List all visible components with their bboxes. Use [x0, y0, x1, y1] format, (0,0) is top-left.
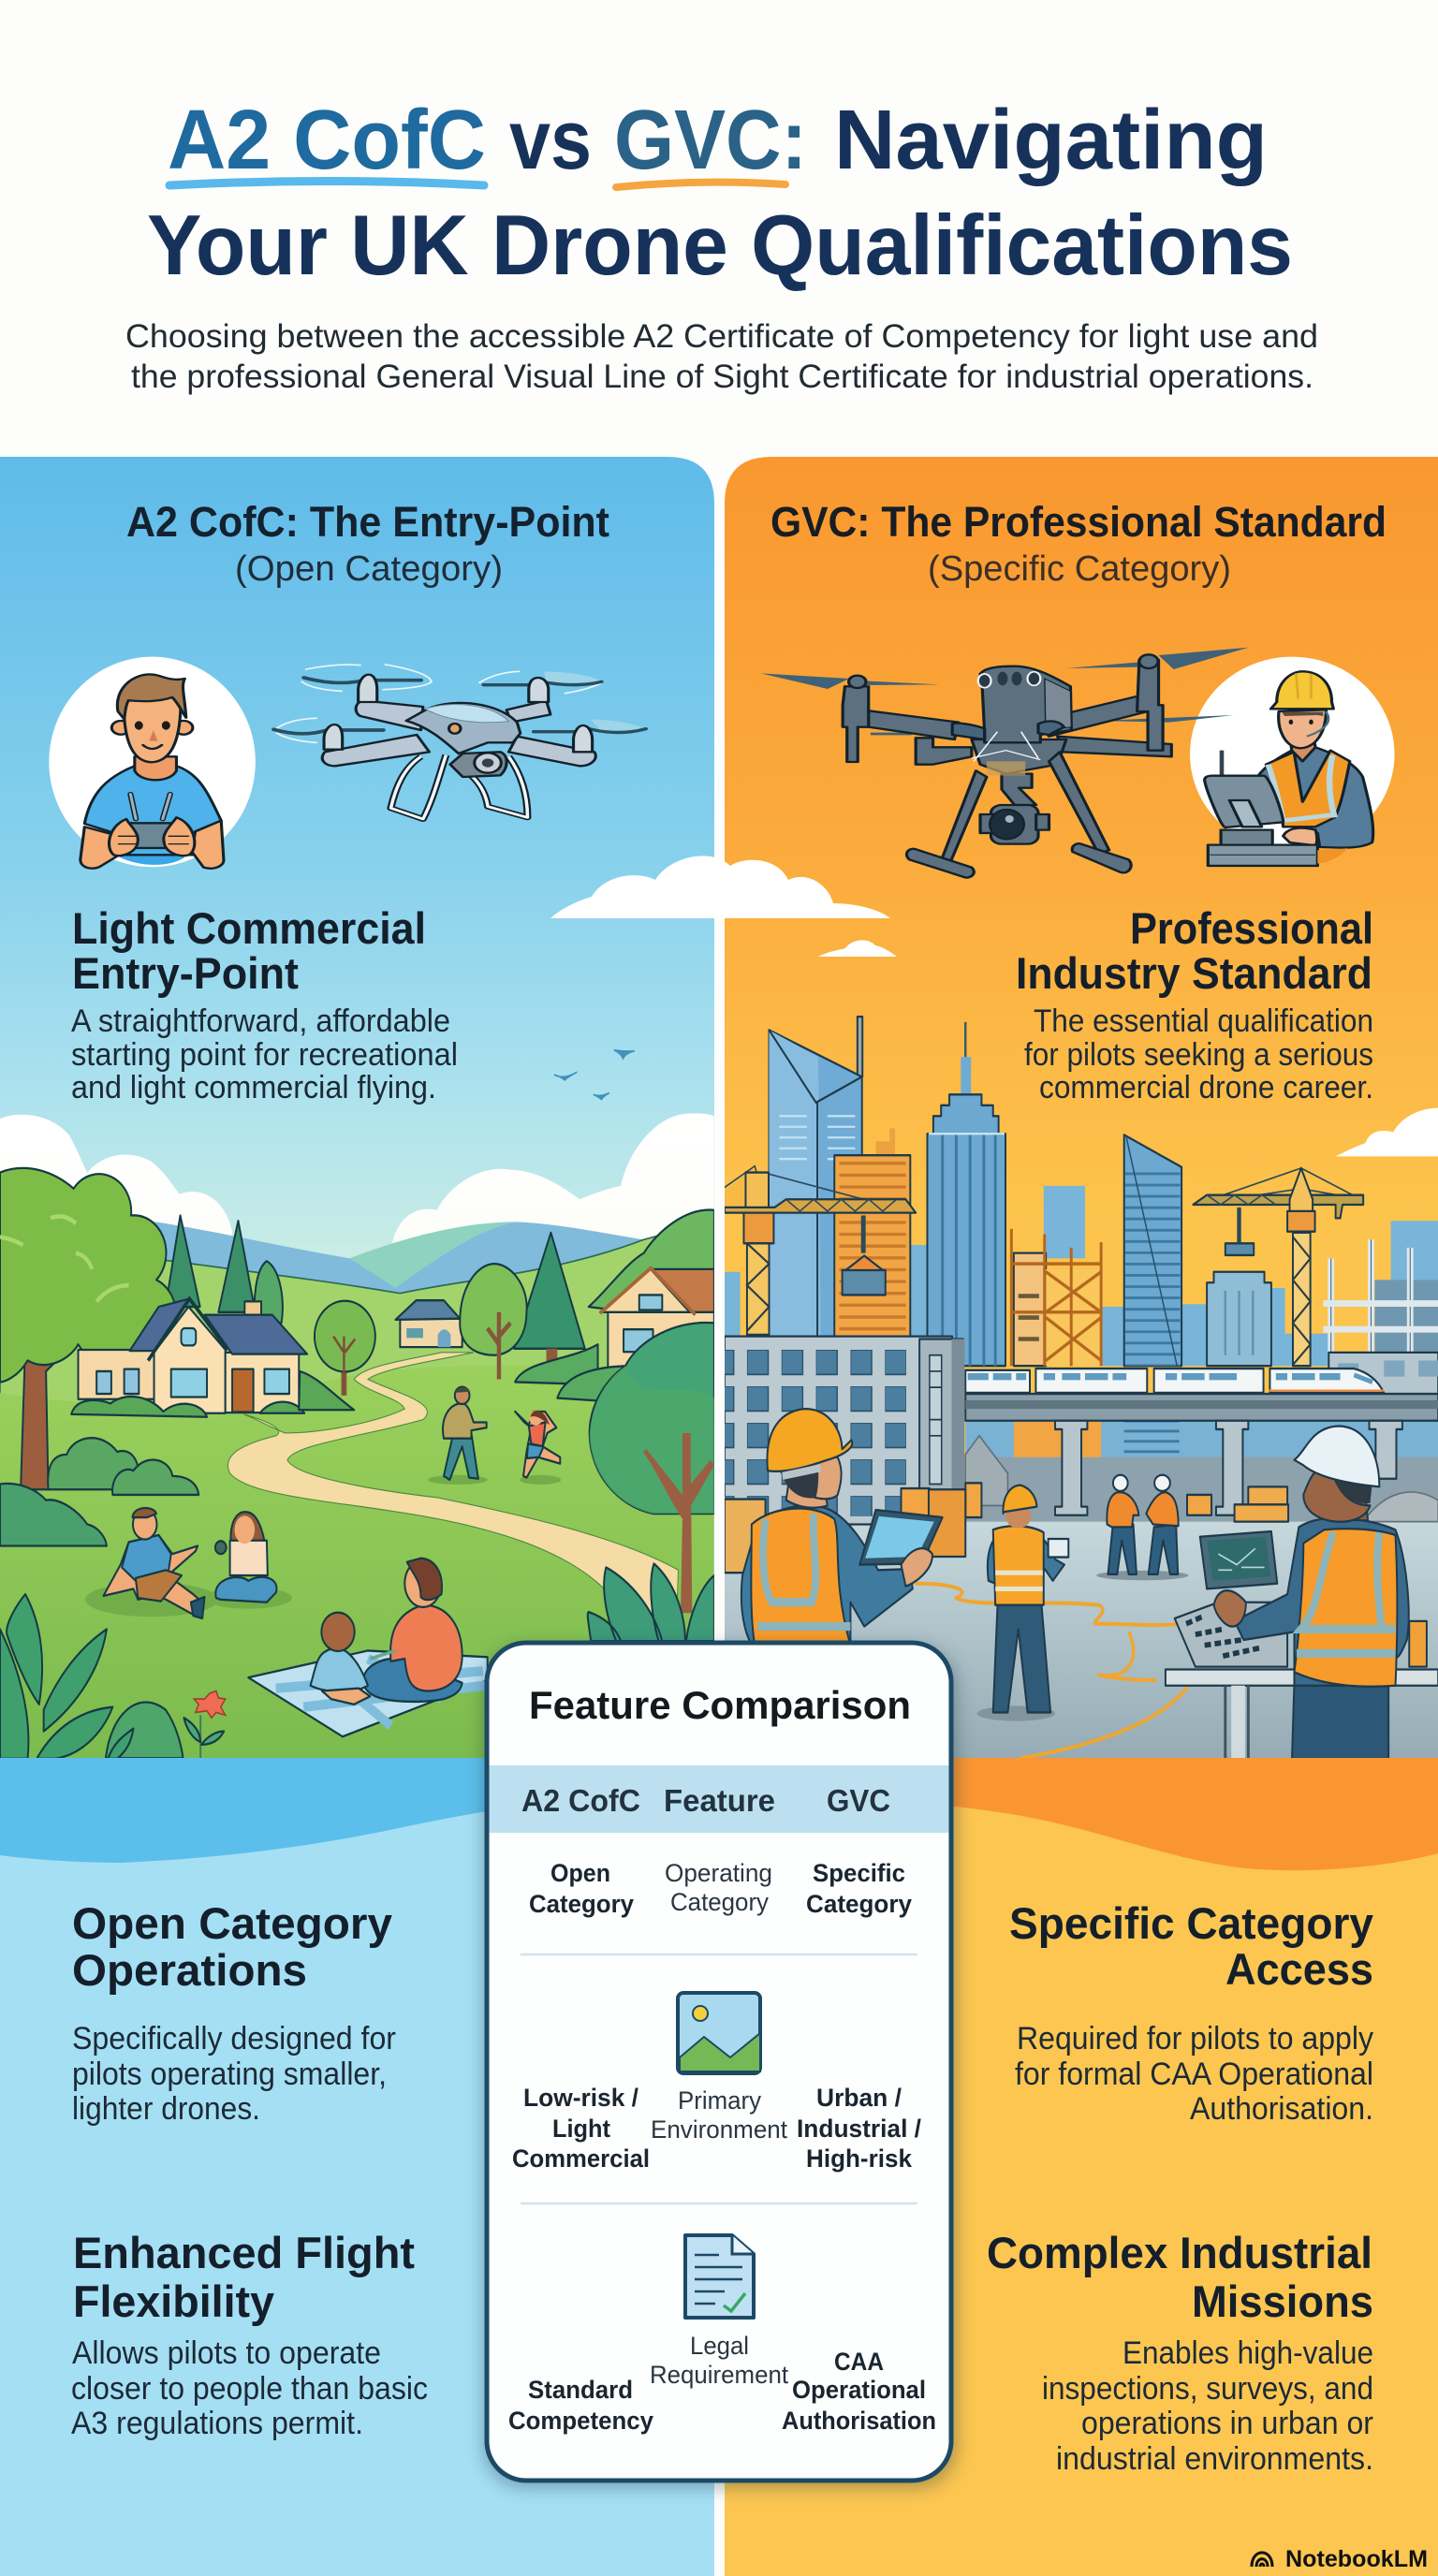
- row: operating category: Category: [806, 1890, 912, 1918]
- row: operating category: Specific: [813, 1859, 905, 1887]
- subtitle: [125, 318, 1318, 395]
- tree middle right: [460, 1264, 598, 1384]
- row: primary environment: Low-risk /: [523, 2084, 638, 2112]
- row: operating category: Category: [670, 1888, 769, 1916]
- row: primary environment: Industrial /: [797, 2115, 921, 2143]
- table header: Feature: [664, 1783, 775, 1818]
- panel heading: A2 CofC: (Open Category): [235, 549, 503, 589]
- description: A2 CofC: and light commercial flying.: [71, 1070, 436, 1105]
- description: A2 CofC: starting point for recreational: [71, 1037, 458, 1073]
- small cloud on GVC panel: [818, 940, 897, 957]
- description: GVC: for pilots seeking a serious: [1024, 1037, 1373, 1073]
- lower panel: A2 CofC: [0, 1758, 714, 2576]
- title: A2 CofC: [168, 94, 486, 187]
- comparison card: [487, 1643, 951, 2481]
- icon: industrial drone: [761, 648, 1249, 878]
- feature: Specific Category Access: Authorisation.: [1190, 2091, 1373, 2127]
- birds: [554, 1050, 635, 1099]
- picnic blanket with parent and child: [248, 1559, 488, 1736]
- small workers: [1096, 1475, 1188, 1580]
- feature: Specific Category Access: [1009, 1898, 1373, 2127]
- main house: [71, 1298, 354, 1417]
- train and viaduct: [965, 1368, 1438, 1421]
- title: GVC:: [614, 94, 807, 187]
- title: Your UK Drone Qualifications: [147, 198, 1293, 293]
- panel heading: GVC: GVC: The Professional Standard: [770, 498, 1387, 546]
- subtitle: Choosing between the accessible A2 Certificate of Competency for light use and: [125, 318, 1318, 355]
- description: GVC: commercial drone career.: [1039, 1070, 1373, 1105]
- cables: [915, 1584, 1188, 1758]
- middle worker: [977, 1486, 1068, 1721]
- row: primary environment: Light: [552, 2115, 610, 2143]
- people: walking man and girl: [428, 1387, 561, 1485]
- row: operating category: Operating: [665, 1859, 772, 1887]
- row: primary environment: Commercial: [512, 2144, 650, 2173]
- feature: Complex Industrial Missions: [987, 2228, 1373, 2477]
- foreground worker right with console: [1166, 1426, 1438, 1759]
- icon: landscape picture: [678, 1993, 760, 2073]
- row: primary environment: [512, 2084, 921, 2173]
- panel heading: A2 CofC: [126, 498, 609, 589]
- subtitle: the professional General Visual Line of Sight Certificate for industrial operations.: [131, 359, 1313, 395]
- subheading: Light Commercial Entry-Point: Entry-Point: [72, 948, 299, 998]
- people: sitting couple: [85, 1508, 292, 1618]
- icon: legal document: [685, 2235, 754, 2318]
- description: GVC: [1024, 1003, 1373, 1105]
- description: A2 CofC: [71, 1003, 458, 1105]
- row: operating category: Open: [550, 1859, 610, 1887]
- table header: [489, 1765, 949, 1833]
- feature: Open Category Operations: [72, 1898, 396, 2127]
- ground and wall: [965, 1457, 1438, 1530]
- subheading: Professional Industry Standard: Industry Standard: [1016, 948, 1372, 998]
- feature: Specific Category Access: Required for pilots to apply: [1017, 2021, 1373, 2056]
- row: primary environment: High-risk: [806, 2144, 913, 2173]
- row: legal requirement: Legal: [690, 2332, 749, 2360]
- spire tower: [927, 1022, 1005, 1366]
- subheading: Professional Industry Standard: [1016, 903, 1373, 998]
- scaffold building: [1011, 1229, 1101, 1366]
- skyline back: [725, 1186, 1438, 1366]
- bushes left: [0, 1438, 198, 1545]
- foreground leaves and flower: [0, 1594, 226, 1759]
- row: operating category: [529, 1859, 912, 1918]
- title: [147, 94, 1293, 293]
- icon: pilot with controller: [49, 657, 256, 869]
- feature: Complex Industrial Missions: Enables high-value: [1123, 2335, 1373, 2371]
- left building: [725, 1337, 964, 1525]
- illustration: countryside park scene: [0, 1050, 714, 1759]
- icon: light drone: [273, 665, 646, 819]
- feature: Open Category Operations: Open Category: [72, 1898, 392, 1948]
- panel: GVC top: [725, 457, 1438, 1759]
- big tree right: [557, 1323, 714, 1613]
- far house: [395, 1300, 462, 1347]
- pine trees: [166, 1215, 585, 1362]
- panel: A2 CofC top: [0, 457, 714, 1759]
- subheading: Light Commercial Entry-Point: [72, 903, 426, 998]
- title: Navigating: [834, 94, 1268, 187]
- feature: Enhanced Flight Flexibility: A3 regulations permit.: [71, 2406, 363, 2441]
- crate right: [1409, 1621, 1427, 1667]
- row: legal requirement: Authorisation: [782, 2407, 936, 2435]
- feature: Enhanced Flight Flexibility: Allows pilots to operate: [72, 2335, 381, 2371]
- path: [227, 1353, 679, 1634]
- feature: Complex Industrial Missions: operations in urban or: [1081, 2406, 1373, 2441]
- lower panel: GVC: [725, 1758, 1438, 2576]
- leaves right foreground: [588, 1563, 714, 1641]
- table header: A2 CofC: [521, 1783, 640, 1818]
- description: GVC: The essential qualification: [1034, 1003, 1373, 1039]
- glass wedge tower: [1124, 1134, 1181, 1366]
- feature: Specific Category Access: for formal CAA Operational: [1015, 2056, 1373, 2092]
- crates: [725, 1483, 1438, 1573]
- right house: [589, 1210, 714, 1371]
- panel heading: A2 CofC: A2 CofC: The Entry-Point: [126, 498, 609, 546]
- icon: engineer at console: [1190, 657, 1395, 866]
- foreground worker left with tablet: [741, 1409, 943, 1646]
- feature: Enhanced Flight Flexibility: [71, 2228, 428, 2441]
- row: legal requirement: Requirement: [650, 2361, 788, 2389]
- table header: GVC: [827, 1783, 890, 1818]
- feature: Complex Industrial Missions: Missions: [1192, 2276, 1373, 2326]
- feature: Open Category Operations: lighter drones.: [72, 2091, 260, 2127]
- right crane: [1193, 1168, 1363, 1366]
- row: legal requirement: [508, 2332, 936, 2435]
- row: primary environment: Primary: [678, 2086, 761, 2115]
- title: vs: [509, 94, 592, 187]
- comparison card shadow: [483, 1646, 957, 2488]
- feature: Specific Category Access: Specific Category: [1009, 1898, 1373, 1948]
- tall glass tower: [770, 1017, 862, 1339]
- feature: Enhanced Flight Flexibility: closer to people than basic: [71, 2371, 428, 2407]
- row: primary environment: Urban /: [816, 2084, 902, 2112]
- small tree: [315, 1301, 375, 1396]
- subheading: Professional Industry Standard: Professional: [1130, 903, 1373, 953]
- illustration: urban construction scene: [725, 1017, 1438, 1759]
- cloud across the centre divider: [550, 856, 890, 918]
- small cloud right: [1336, 1108, 1438, 1156]
- row: legal requirement: Operational: [792, 2376, 926, 2404]
- feature: Complex Industrial Missions: inspections, surveys, and: [1042, 2371, 1373, 2407]
- feature: Complex Industrial Missions: Complex Industrial: [987, 2228, 1372, 2277]
- row: legal requirement: Competency: [508, 2407, 653, 2435]
- orange building: [834, 1128, 910, 1337]
- feature: Enhanced Flight Flexibility: Enhanced Flight: [73, 2228, 415, 2277]
- row: primary environment: Environment: [651, 2115, 787, 2144]
- tree big left: [0, 1168, 176, 1489]
- row: legal requirement: Standard: [528, 2376, 633, 2404]
- left crane: [725, 1166, 916, 1335]
- description: A2 CofC: A straightforward, affordable: [71, 1003, 450, 1039]
- panel heading: GVC: (Specific Category): [928, 549, 1231, 589]
- feature: Specific Category Access: Access: [1225, 1944, 1373, 1994]
- feature: Open Category Operations: Operations: [72, 1945, 307, 1995]
- feature: Enhanced Flight Flexibility: Flexibility: [73, 2276, 274, 2326]
- subheading: Light Commercial Entry-Point: Light Commercial: [72, 903, 426, 953]
- viaduct pillars: [1055, 1421, 1402, 1515]
- panel heading: GVC: [770, 498, 1387, 589]
- right steel structure: [1323, 1239, 1438, 1396]
- feature: Open Category Operations: Specifically designed for: [72, 2021, 396, 2056]
- NotebookLM logo: NotebookLM: [1285, 2546, 1428, 2572]
- row: legal requirement: CAA: [834, 2348, 884, 2376]
- feature: Open Category Operations: pilots operating smaller,: [72, 2056, 387, 2092]
- mid tower: [1207, 1272, 1271, 1366]
- lower fill: [965, 1393, 1438, 1460]
- feature: Complex Industrial Missions: industrial environments.: [1056, 2441, 1373, 2477]
- card title: Feature Comparison: [529, 1683, 911, 1727]
- row: operating category: Category: [529, 1890, 634, 1918]
